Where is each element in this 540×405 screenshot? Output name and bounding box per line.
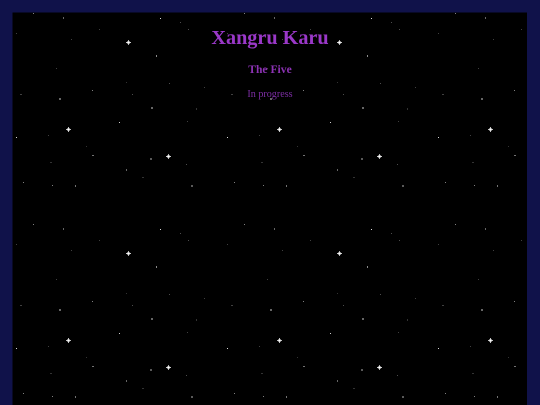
title: Xangru Karu: [211, 27, 329, 49]
status text: In progress: [247, 88, 293, 100]
subtitle: The Five: [248, 63, 292, 76]
